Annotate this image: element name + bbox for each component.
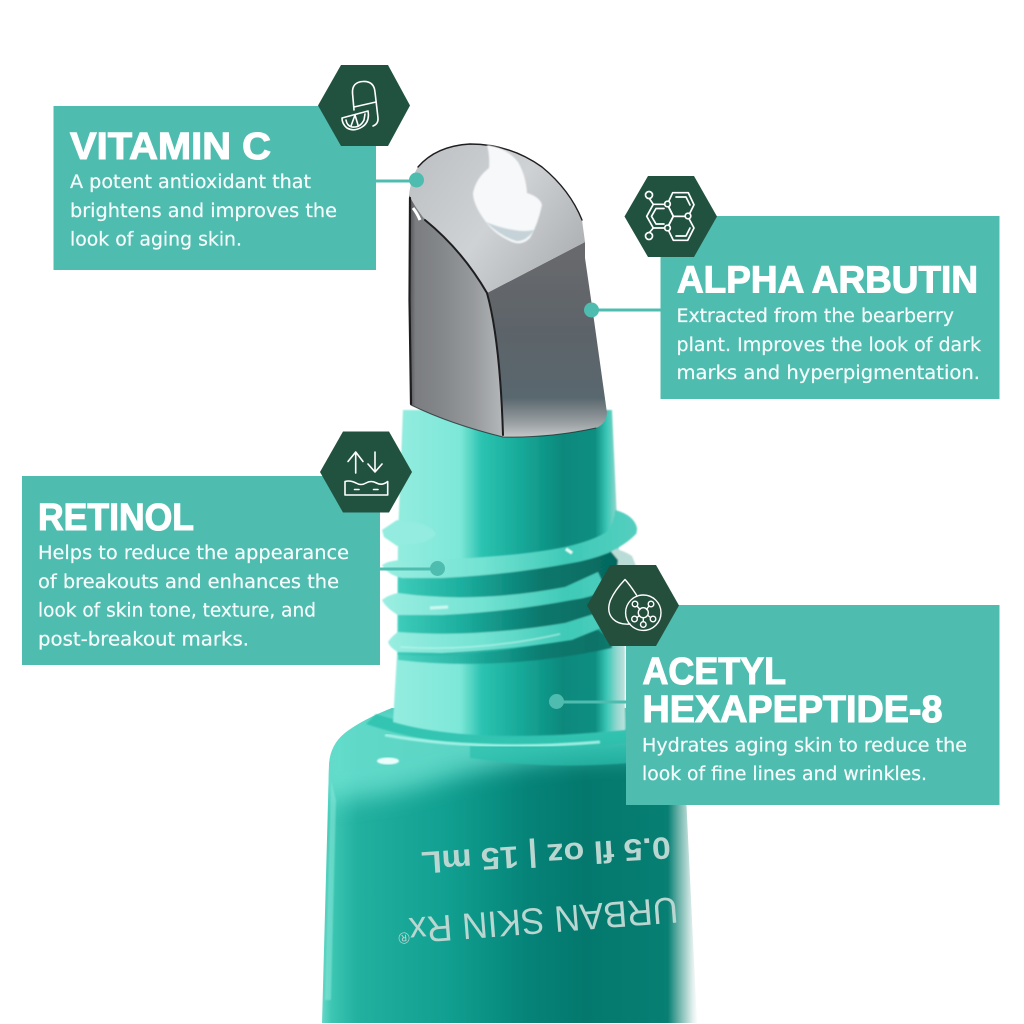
panel background [22, 476, 380, 665]
connector line [557, 700, 626, 704]
description [676, 306, 981, 384]
panel background [660, 216, 1000, 399]
tip top face [409, 144, 585, 293]
panel: acetyl hexapeptide-8 [549, 565, 1000, 805]
connector dot [584, 302, 599, 318]
tip left panel [409, 195, 503, 437]
hexagon badge [318, 65, 410, 146]
heading [642, 651, 942, 731]
hexagon badge [587, 565, 679, 646]
product: metal applicator tip [409, 144, 607, 437]
icon: droplet with molecule [609, 580, 661, 630]
panel: alpha arbutin [584, 176, 1000, 399]
hexagon badge [320, 432, 412, 512]
screw threads [382, 510, 637, 656]
description: look of aging skin. [70, 230, 242, 250]
product: tube [315, 410, 697, 1023]
printed text: brand: ® [397, 928, 410, 946]
icon: capsule and citrus [342, 81, 378, 130]
description: look of fine lines and wrinkles. [642, 764, 927, 785]
connector line [380, 568, 438, 570]
printed text: brand: URBAN SKIN Rx [396, 889, 680, 952]
description: post-breakout marks. [38, 630, 249, 650]
tube body [315, 700, 697, 1023]
panel: retinol [22, 432, 445, 665]
description: of breakouts and enhances the [38, 572, 339, 593]
panel: vitamin c [54, 65, 424, 270]
description: Extracted from the bearberry [676, 306, 954, 327]
tube neck [393, 410, 625, 736]
panel background [626, 605, 1000, 805]
description: Hydrates aging skin to reduce the [642, 736, 967, 756]
description: A potent antioxidant that [70, 172, 311, 193]
connector line [376, 180, 416, 182]
tip edge lines [410, 144, 596, 437]
connector dot [549, 694, 564, 709]
description: look of skin tone, texture, and [38, 600, 316, 622]
icon: molecule [646, 192, 694, 240]
description: brightens and improves the [70, 201, 337, 222]
heading: ALPHA ARBUTIN [677, 260, 978, 302]
heading: RETINOL [38, 497, 194, 539]
connector dot [430, 561, 445, 576]
icon: arrows over water [345, 452, 388, 495]
cream dollop [473, 145, 542, 243]
panel background [54, 106, 376, 270]
description [642, 736, 967, 785]
heading: HEXAPEPTIDE-8 [642, 689, 942, 731]
description [38, 543, 349, 650]
description: Helps to reduce the appearance [38, 543, 349, 564]
connector line [592, 308, 661, 312]
tip right panel [487, 242, 607, 437]
hexagon badge [624, 176, 717, 257]
description: marks and hyperpigmentation. [676, 363, 980, 384]
description: plant. Improves the look of dark [676, 335, 981, 356]
printed text: volume: 0.5 fl oz | 15 mL [420, 830, 672, 880]
heading: VITAMIN C [70, 126, 271, 168]
connector dot [409, 172, 424, 188]
description [70, 172, 337, 250]
heading: ACETYL [642, 651, 786, 693]
